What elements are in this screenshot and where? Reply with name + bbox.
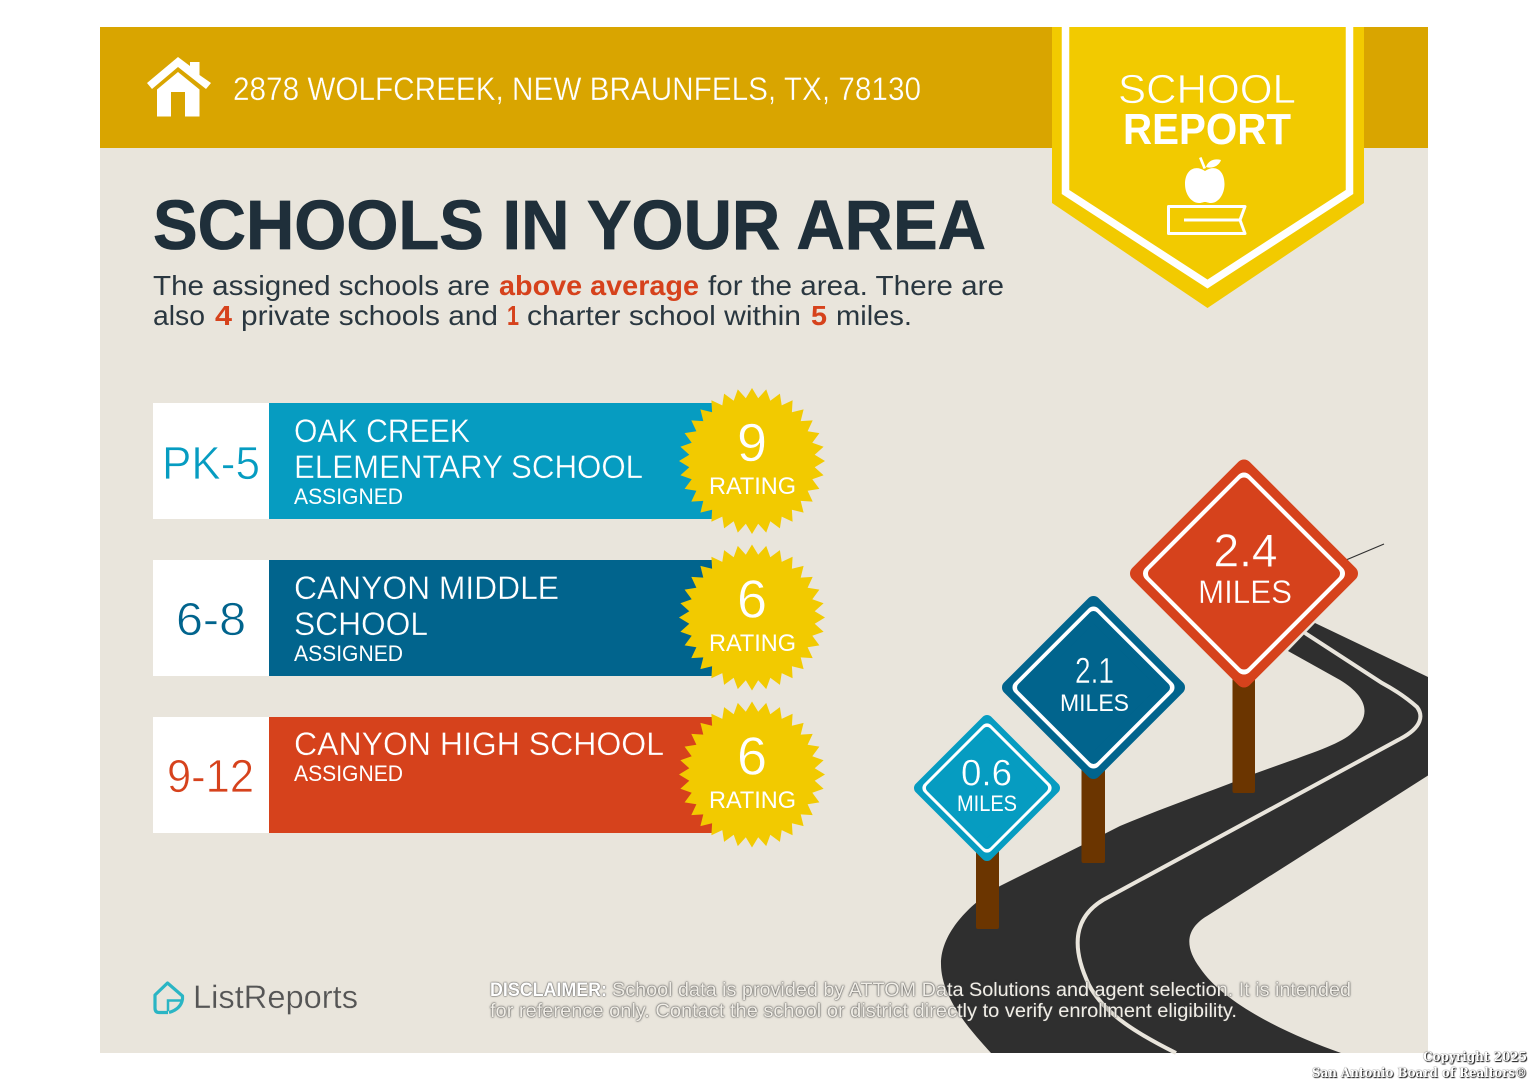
sign: 2.1 miles: MILES — [1060, 690, 1129, 717]
wire behind sign — [1346, 544, 1384, 560]
school name: CANYON MIDDLE — [294, 570, 559, 606]
intro text: for the area. There are — [708, 270, 1004, 301]
disclaimer: School data is provided by ATTOM Data Solutions and agent selection. It is intended — [612, 980, 1351, 1001]
rating badge: RATING — [709, 787, 796, 814]
header band — [100, 27, 1428, 148]
rating badge — [679, 544, 825, 690]
school name: SCHOOL — [294, 606, 428, 642]
title: SCHOOLS IN YOUR AREA — [153, 186, 986, 264]
disclaimer — [490, 980, 1351, 1022]
school name: ASSIGNED — [294, 484, 403, 509]
sign: 2.4 miles: MILES — [1198, 574, 1292, 610]
school row: Canyon High — [153, 702, 825, 848]
school row: Oak Creek Elementary — [153, 388, 825, 534]
address: 2878 WOLFCREEK, NEW BRAUNFELS, TX, 78130 — [233, 71, 921, 107]
disclaimer: DISCLAIMER: — [490, 980, 607, 1001]
rating badge: 9 — [737, 413, 767, 473]
school name: ASSIGNED — [294, 761, 403, 786]
intro text — [153, 270, 1004, 331]
school name: ELEMENTARY SCHOOL — [294, 449, 643, 485]
badge title: REPORT — [1123, 105, 1291, 154]
road illustration — [941, 623, 1428, 1053]
rating badge — [679, 702, 825, 848]
intro text: charter school within — [527, 300, 801, 331]
intro text: The assigned schools are — [153, 270, 490, 301]
rating badge: 6 — [737, 726, 767, 786]
sign: 0.6 miles — [920, 721, 1054, 929]
intro text: 1 — [507, 300, 519, 331]
sign: 2.4 miles — [1138, 468, 1350, 793]
rating badge — [679, 388, 825, 534]
grade label: 6-8 — [176, 593, 246, 645]
intro text: 4 — [215, 300, 232, 331]
grade label: 9-12 — [167, 750, 254, 802]
copyright — [1312, 1050, 1527, 1080]
rating badge: RATING — [709, 630, 796, 657]
badge title: SCHOOL — [1118, 66, 1296, 112]
school row: Canyon Middle — [153, 544, 825, 690]
school name — [294, 570, 559, 666]
icon: apple on book — [1168, 157, 1245, 234]
icon: house — [147, 57, 211, 116]
intro text: private schools and — [241, 300, 498, 331]
school name — [294, 413, 643, 509]
badge title — [1118, 66, 1296, 154]
intro text: also — [153, 300, 205, 331]
sign: 2.4 miles: 2.4 — [1214, 524, 1278, 576]
sign: 2.1 miles: 2.1 — [1075, 650, 1114, 691]
badge: school report — [1052, 27, 1364, 308]
school name — [294, 726, 664, 786]
intro text: 5 — [811, 300, 827, 331]
grade label: PK-5 — [162, 437, 260, 489]
sign: 0.6 miles: MILES — [957, 791, 1017, 816]
intro text: above average — [499, 270, 699, 301]
intro text: miles. — [836, 300, 912, 331]
school name: OAK CREEK — [294, 413, 470, 449]
school name: ASSIGNED — [294, 641, 403, 666]
sign: 0.6 miles: 0.6 — [961, 752, 1012, 794]
school name: CANYON HIGH SCHOOL — [294, 726, 664, 762]
logo: ListReports: ListReports — [193, 979, 358, 1015]
rating badge: RATING — [709, 473, 796, 500]
sign: 2.1 miles — [1009, 603, 1178, 863]
rating badge: 6 — [737, 570, 767, 630]
disclaimer: for reference only. Contact the school or district directly to verify enrollment eligibility. — [490, 1001, 1237, 1022]
